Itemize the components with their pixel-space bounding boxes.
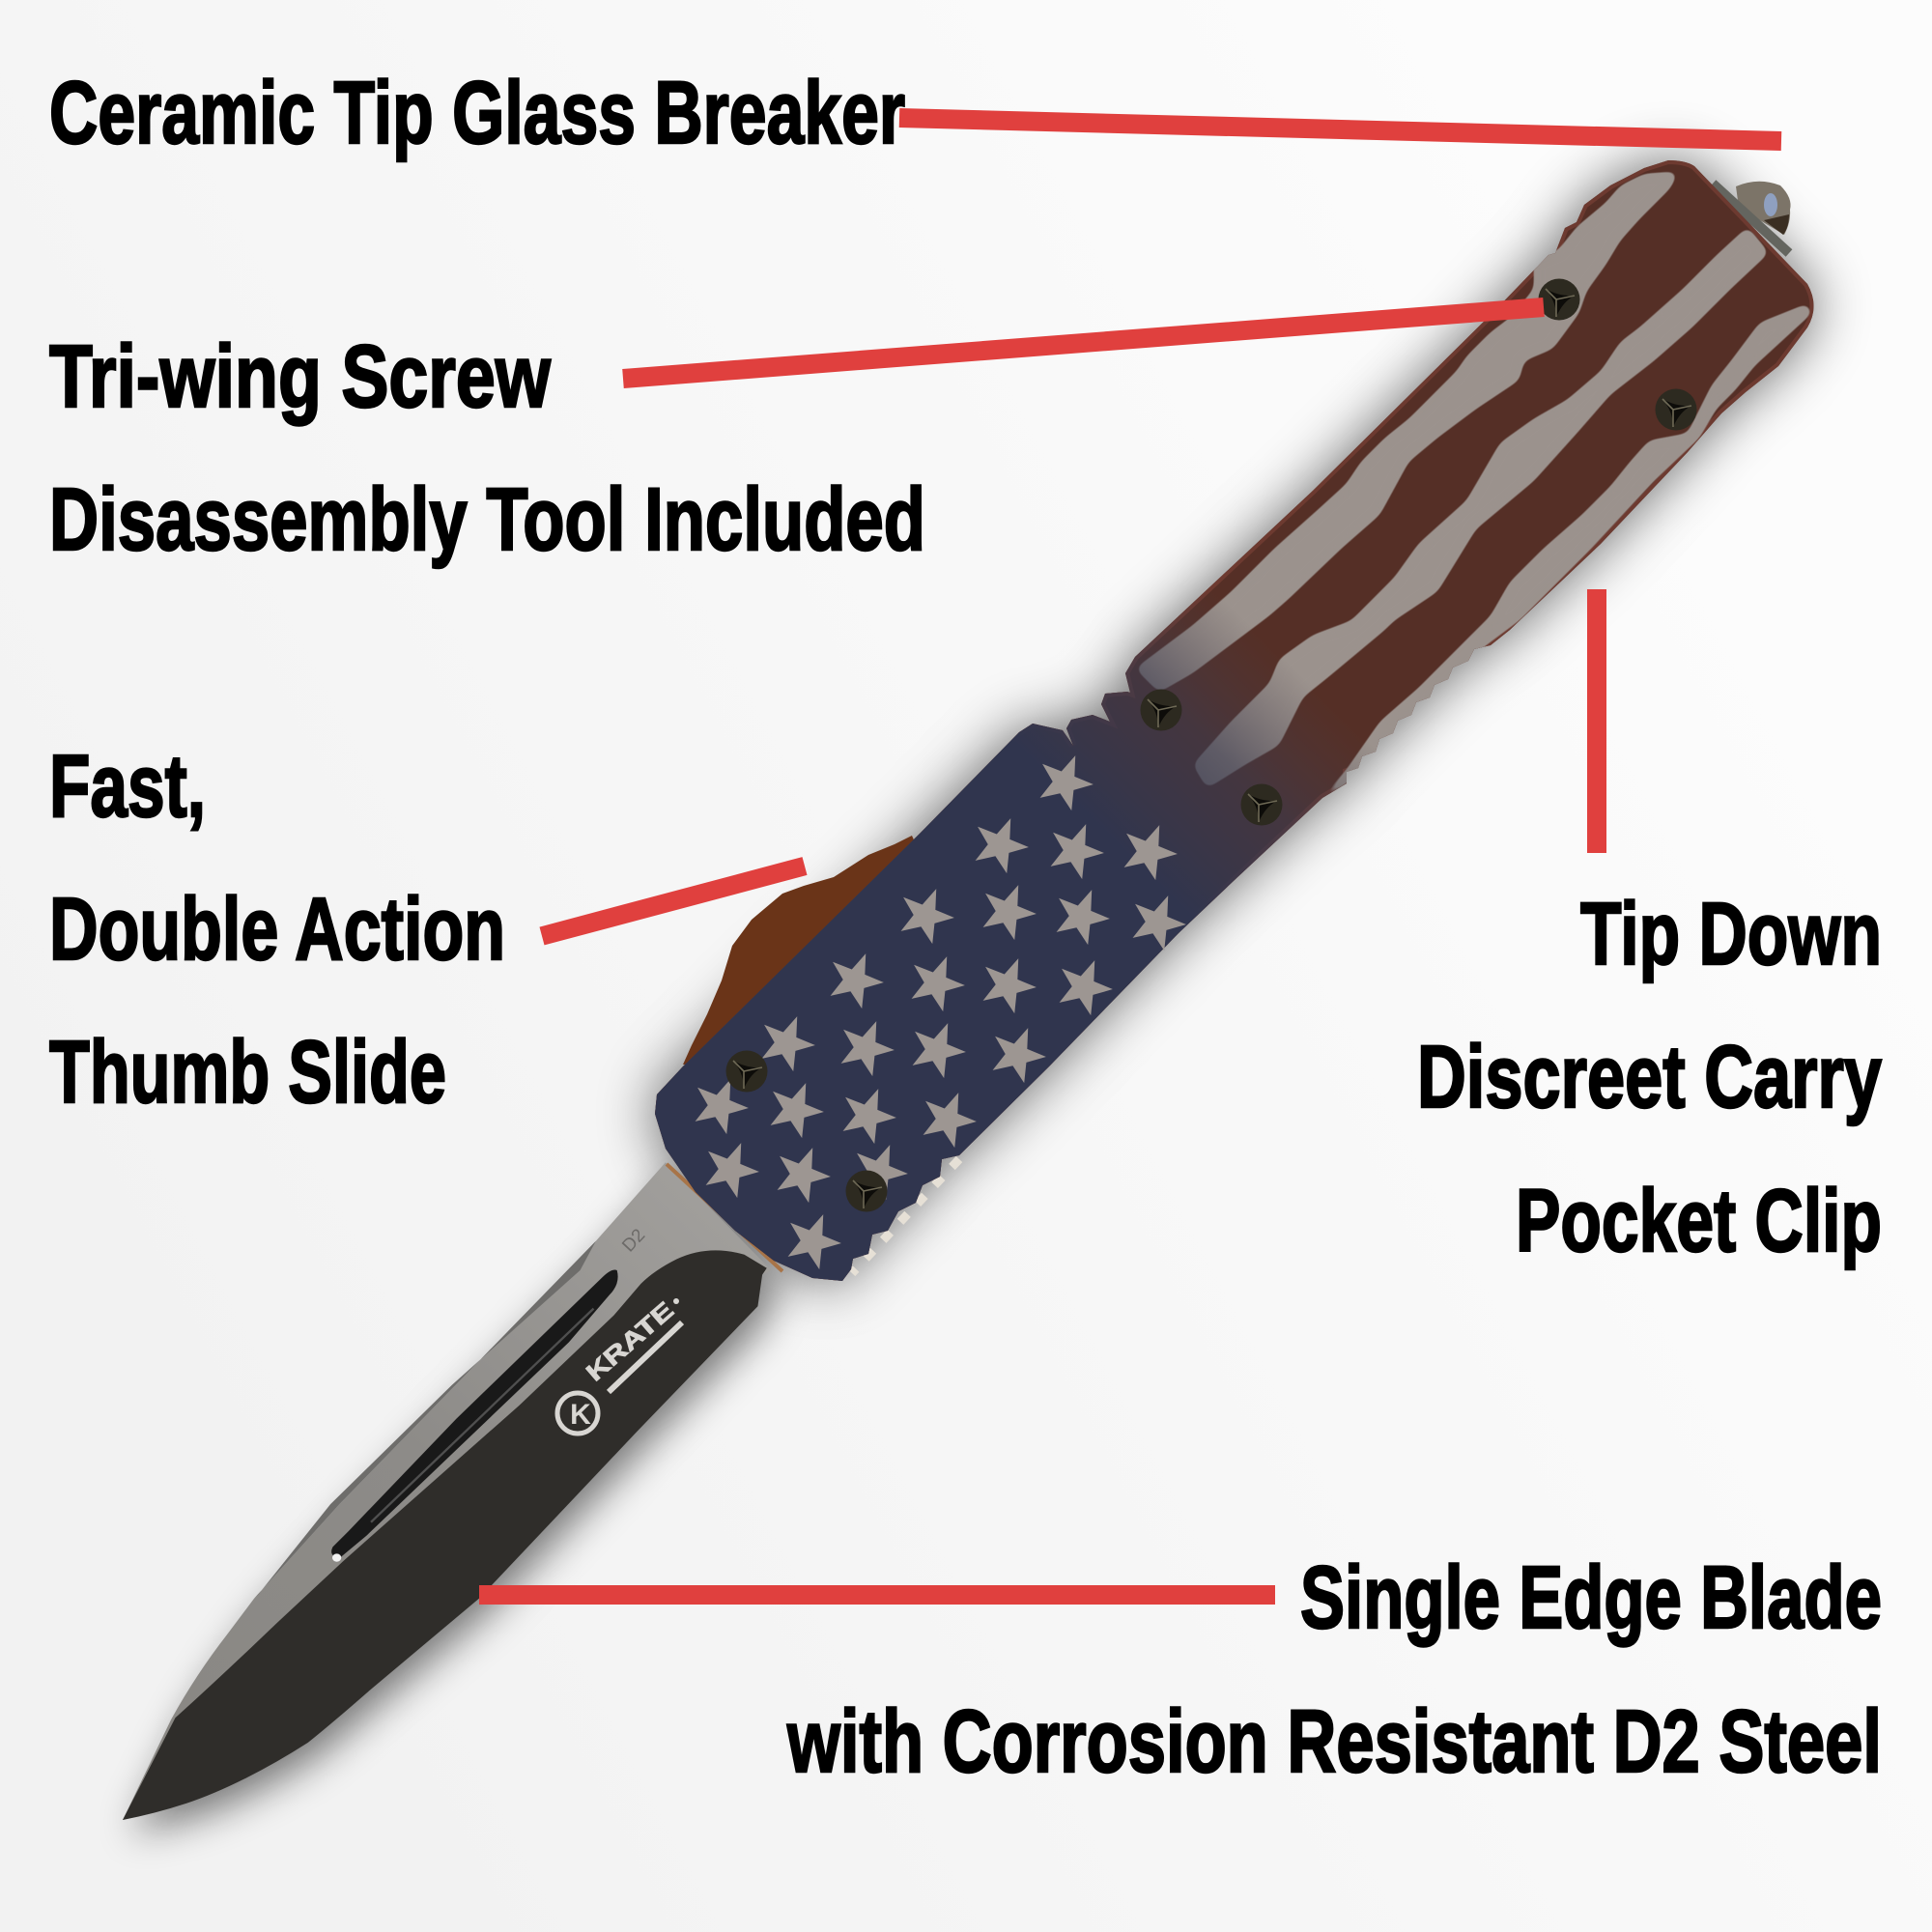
label: tri-wing screw: Tri-wing Screw: [49, 327, 551, 426]
fuller highlight: [371, 1309, 593, 1522]
tip collar: [1713, 184, 1789, 253]
handle base: [628, 145, 1835, 1304]
black blade coating: [123, 1250, 767, 1820]
handle: [628, 145, 1835, 1304]
label: thumb slide: Thumb Slide: [49, 1023, 446, 1122]
label: ceramic tip: Ceramic Tip Glass Breaker: [49, 64, 905, 162]
blade: [123, 1162, 771, 1820]
logo underbar: [609, 1322, 682, 1392]
tip shadow: [1764, 214, 1789, 235]
leader line: pocket clip: [1587, 589, 1606, 853]
stripe middle: [1193, 226, 1769, 788]
knife shadow: [132, 160, 1814, 1833]
fuller groove: [331, 1270, 618, 1558]
leader line: glass breaker: [899, 118, 1781, 141]
label: fast: Fast,: [49, 737, 206, 836]
blade steel body: [123, 1162, 771, 1820]
ceramic tip glass breaker: [1713, 182, 1791, 253]
steel stamp: D2: [618, 1225, 649, 1256]
stripe upper: [1135, 171, 1678, 693]
tip highlight: [1764, 193, 1777, 216]
navy fade: [655, 611, 1360, 1281]
label: disassembly tool: Disassembly Tool Included: [49, 470, 925, 569]
knife illustration: [123, 145, 1835, 1833]
leader line: blade: [479, 1585, 1275, 1605]
handle bevel: [655, 160, 1814, 1281]
stars: [685, 746, 1194, 1273]
serration highlights: [852, 1159, 959, 1273]
fuller glint: [332, 1553, 341, 1562]
handle rim: [667, 1164, 782, 1271]
label: double action: Double Action: [49, 880, 505, 979]
tri-wing screws: [726, 278, 1696, 1211]
spine bevel: [254, 1241, 596, 1599]
tip dome: [1736, 182, 1791, 235]
stripe lower: [1313, 303, 1812, 808]
leader line: thumb slide: [542, 866, 805, 936]
registered mark: [673, 1298, 679, 1304]
thumb slide: [683, 836, 927, 1065]
leader line: tri-wing screw: [623, 307, 1544, 379]
flag stripes: [1135, 171, 1812, 808]
logo wordmark: KRATE: [582, 1296, 679, 1387]
logo initial: K: [570, 1399, 591, 1431]
blade logo: [557, 1296, 682, 1434]
logo ring: [557, 1393, 598, 1434]
